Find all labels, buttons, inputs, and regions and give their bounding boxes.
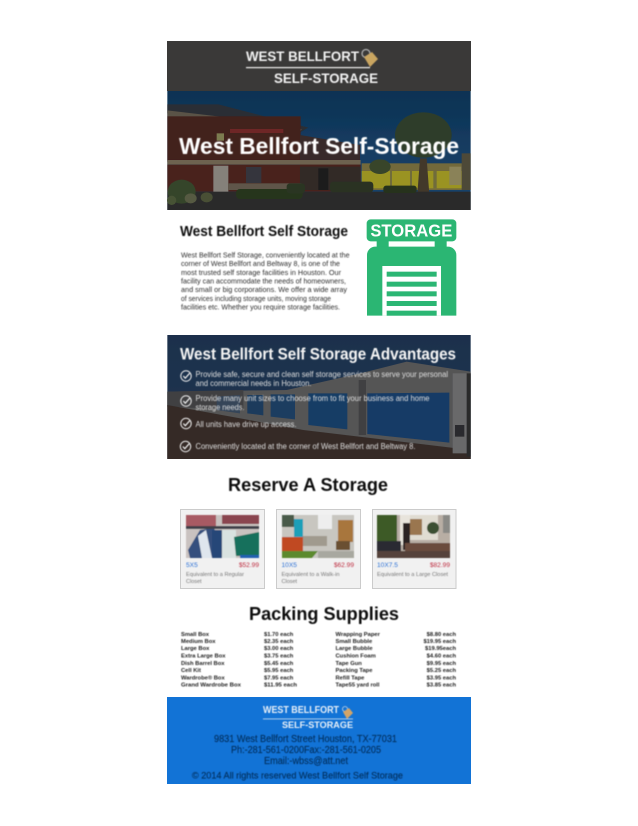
column: box prices: $1.70 each (264, 632, 294, 638)
logo: West Bellfort Self-Storage: SELF-STORAGE (274, 70, 378, 86)
size and price: $82.99 (430, 562, 450, 569)
heading: packing supplies: Packing Supplies (249, 603, 399, 624)
column: supply names: Tape Gun (336, 661, 362, 667)
column: box names: Medium Box (181, 639, 216, 645)
column: box names: Large Box (181, 646, 210, 652)
column: supply prices: $3.95 each (427, 675, 456, 681)
column: supply prices: $4.60 each (427, 654, 456, 660)
size and price (186, 562, 259, 585)
column: supply names: Packing Tape (336, 668, 373, 674)
column: supply prices: $9.95 each (427, 661, 456, 667)
size and price: 10X7.5 (377, 562, 398, 569)
size and price: Equivalent to a Large Closet (377, 572, 448, 578)
column: box names: Cell Kit (181, 668, 201, 674)
copyright: © 2014 All rights reserved West Bellfort Self Storage (192, 770, 403, 782)
about paragraph (181, 251, 350, 311)
section: about (180, 224, 350, 311)
column: box prices: $3.00 each (264, 646, 294, 652)
column: supply names: Small Bubble (336, 639, 373, 645)
item 2: storage needs. (196, 403, 244, 412)
advantages list (180, 370, 448, 452)
card: 10X5 (276, 510, 360, 588)
about heading: West Bellfort Self Storage (180, 224, 348, 240)
logo: West Bellfort Self-Storage (246, 48, 378, 86)
photo: drive-up units (167, 335, 471, 459)
size and price: Equivalent to a Walk-in (282, 572, 340, 578)
about paragraph: West Bellfort Self Storage, conveniently located at the (181, 251, 350, 260)
column: supply prices: $3.85 each (427, 683, 456, 689)
column: box prices: $5.95 each (264, 668, 294, 674)
photo: clothes rack (186, 515, 259, 558)
footer (167, 697, 471, 784)
column: box prices: $2.35 each (264, 639, 294, 645)
icon: padlock (362, 50, 378, 67)
column: box names (181, 632, 242, 689)
size and price: Equivalent to a Regular (186, 572, 244, 578)
size and price (377, 562, 450, 578)
footer logo: WEST BELLFORT (263, 705, 339, 716)
item 2 (181, 394, 430, 412)
column: box names: Dish Barrel Box (181, 661, 225, 667)
column: supply names (336, 632, 381, 689)
footer contact (192, 734, 403, 782)
column: supply prices: $19.95 each (423, 639, 456, 645)
column: supply names: Wrapping Paper (336, 632, 381, 638)
hero title: West Bellfort Self-Storage (179, 133, 459, 159)
icon: footer padlock (342, 706, 353, 719)
column: box names: Small Box (181, 632, 210, 638)
footer contact: 9831 West Bellfort Street Houston, TX-77031 (214, 734, 397, 745)
header banner (167, 41, 471, 91)
about paragraph: of services including storage units, moving storage (181, 294, 331, 303)
photo: furnished room (377, 515, 450, 558)
item 1: Provide safe, secure and clean self storage services to serve your personal (196, 370, 448, 379)
icon: green storage unit (367, 219, 456, 316)
column: supply prices: $5.25 each (427, 668, 456, 674)
size and price: $52.99 (239, 562, 259, 569)
column: box prices: $11.95 each (264, 683, 297, 689)
price table: packing supplies (181, 632, 456, 689)
about paragraph: and small or big corporations. We offer a wide array (181, 285, 347, 294)
item 1: and commercial needs in Houston. (196, 379, 312, 388)
panel: advantages (167, 335, 471, 459)
size and price: 10X5 (282, 562, 297, 569)
about paragraph: facility can accommodate the needs of homeowners, (181, 276, 346, 286)
about paragraph: most trusted self storage facilities in Houston. Our (181, 268, 342, 277)
footer contact: Ph:-281-561-0200Fax:-281-561-0205 (231, 745, 381, 756)
card: 10X7.5 (372, 510, 456, 588)
about paragraph: facilities etc. Whether you require storage facilities. (181, 302, 340, 311)
item 4: Conveniently located at the corner of West Bellfort and Beltway 8. (196, 442, 416, 451)
advantages heading: West Bellfort Self Storage Advantages (180, 346, 456, 364)
column: supply names: Cushion Foam (336, 654, 376, 660)
column: supply prices (423, 632, 456, 689)
about paragraph: corner of West Bellfort and Beltway 8, is one of the (181, 259, 340, 268)
column: box names: Grand Wardrobe Box (181, 683, 242, 689)
photo: walk-in room (282, 515, 354, 558)
column: supply prices: $19.95each (425, 646, 456, 652)
card: 5X5 (180, 510, 264, 588)
column: box prices: $7.95 each (264, 675, 294, 681)
size and price: Closet (282, 579, 298, 585)
column: box names: Wardrobe® Box (181, 674, 225, 681)
size and price (282, 562, 354, 585)
logo: West Bellfort Self-Storage: WEST BELLFORT (246, 48, 359, 64)
column: box prices (264, 632, 297, 689)
footer contact: Email:-wbss@att.net (264, 756, 348, 767)
column: supply names: Refill Tape (336, 675, 365, 681)
footer logo: SELF-STORAGE (282, 720, 353, 731)
item 3: All units have drive up access. (196, 420, 296, 429)
heading: reserve a storage: Reserve A Storage (228, 475, 388, 495)
column: supply names: Large Bubble (336, 646, 373, 652)
column: supply prices: $8.80 each (427, 632, 456, 638)
column: supply names: Tape55 yard roll (336, 683, 380, 689)
icon: green storage unit: STORAGE (370, 220, 452, 240)
footer logo (263, 705, 353, 731)
size and price: $62.99 (334, 562, 354, 569)
item 2: Provide many unit sizes to choose from to fit your business and home (196, 394, 430, 403)
hero photo with title (167, 91, 471, 210)
column: box prices: $5.45 each (264, 661, 294, 667)
item 1 (181, 370, 448, 388)
column: box prices: $3.75 each (264, 654, 294, 660)
size and price: Closet (186, 579, 202, 585)
column: box names: Extra Large Box (181, 654, 226, 660)
size and price: 5X5 (186, 562, 198, 569)
photo: storage facility (167, 91, 471, 210)
